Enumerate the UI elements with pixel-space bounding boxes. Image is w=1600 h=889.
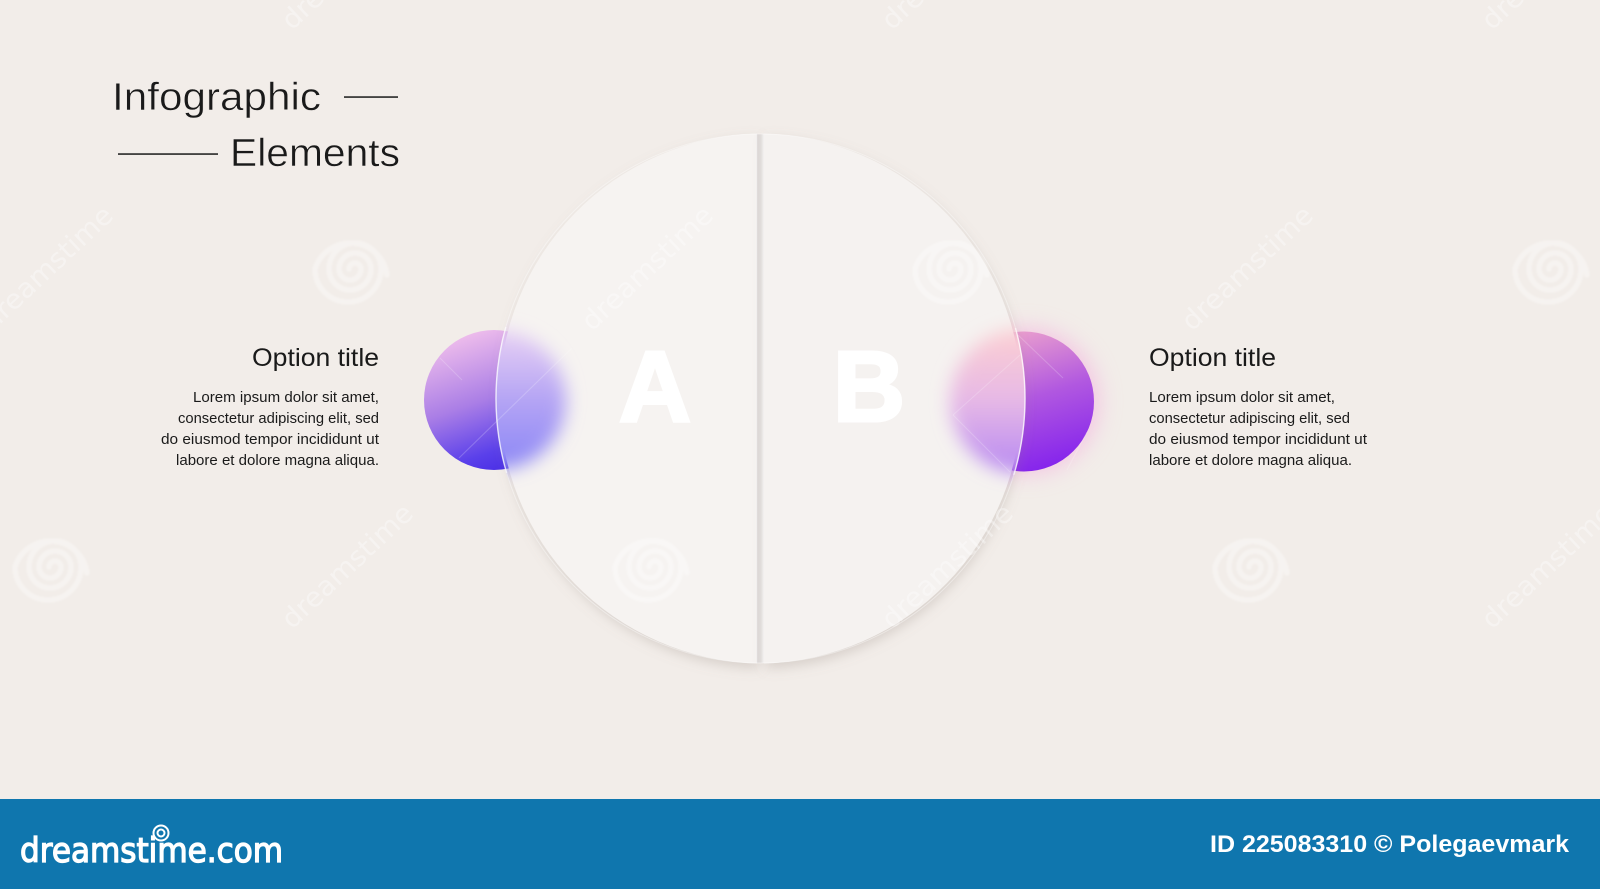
right option body: labore et dolore magna aliqua.: [1149, 452, 1352, 469]
left half disc A: [499, 134, 757, 663]
right option body: consectetur adipiscing elit, sed: [1149, 410, 1350, 427]
right sphere glow: [954, 329, 1098, 473]
right option body: do eiusmod tempor incididunt ut: [1149, 431, 1368, 448]
footer image credit: ID 225083310 © Polegaevmark: [1210, 831, 1570, 858]
watermarks: dreamstime: [276, 498, 420, 635]
left option heading: Option title: [252, 344, 379, 372]
title: Infographic: [112, 76, 321, 119]
title: Elements: [230, 132, 400, 175]
right option body: [1149, 389, 1368, 469]
left glass blurred sphere: [496, 326, 576, 480]
icon: logo spiral: [154, 826, 168, 840]
letter A: A: [619, 331, 691, 443]
text block: left option: [161, 344, 380, 469]
letter B: B: [833, 331, 905, 443]
watermarks: dreamstime: [876, 498, 1020, 635]
right option heading: Option title: [1149, 344, 1276, 372]
right option body: Lorem ipsum dolor sit amet,: [1149, 389, 1335, 406]
panel: glass circle: [495, 134, 1027, 671]
watermark reflection lines on spheres: [440, 335, 1087, 472]
left option body: Lorem ipsum dolor sit amet,: [193, 389, 379, 406]
right half disc B: [764, 134, 1022, 663]
footer bar: [0, 799, 1600, 889]
footer logo: dreamstime.com: [20, 831, 283, 871]
title: [112, 76, 400, 175]
left option body: consectetur adipiscing elit, sed: [178, 410, 379, 427]
watermarks: dreamstime: [1176, 200, 1320, 337]
left sphere rim highlight: [495, 327, 508, 473]
left option body: [161, 389, 380, 469]
left option body: labore et dolore magna aliqua.: [176, 452, 379, 469]
text block: right option: [1149, 344, 1368, 469]
left option body: do eiusmod tempor incididunt ut: [161, 431, 380, 448]
center divider groove: [756, 134, 764, 663]
watermarks: [0, 0, 1600, 635]
glass rim highlight: [496, 134, 1025, 663]
right sphere: [954, 332, 1094, 472]
watermarks: dreamstime: [576, 200, 720, 337]
right sphere rim highlight: [1013, 328, 1026, 475]
right glass blurred sphere: [941, 324, 1026, 484]
left sphere: [424, 330, 564, 470]
